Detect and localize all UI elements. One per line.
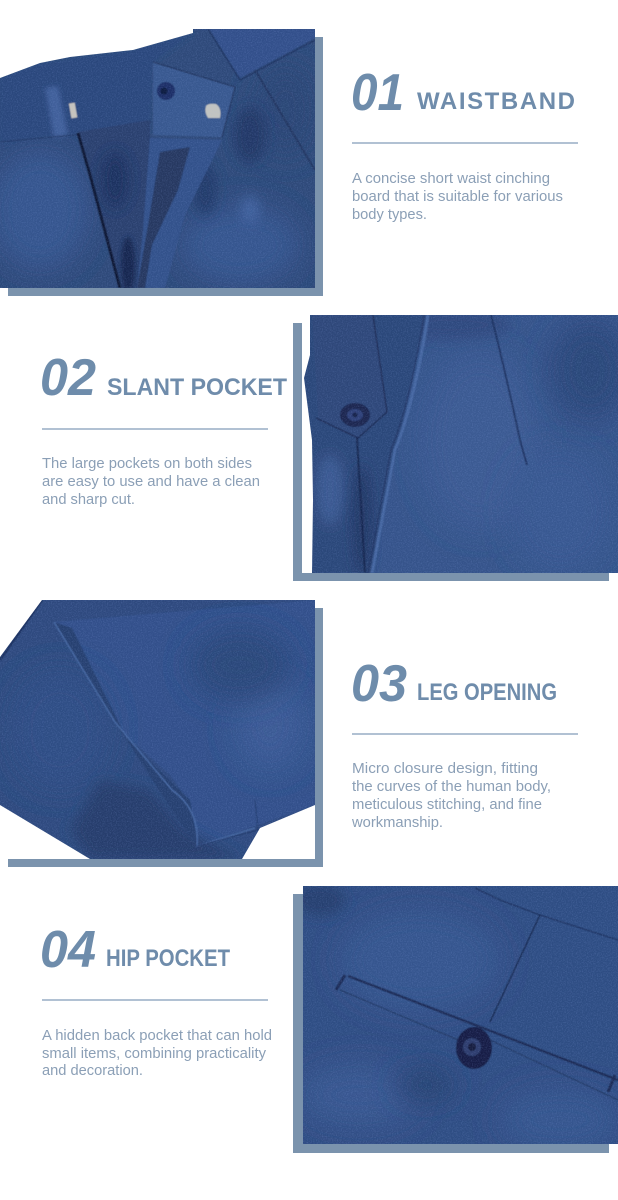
panel: leg opening bbox=[0, 595, 323, 867]
heading: 03 leg opening bbox=[351, 655, 557, 713]
divider bbox=[352, 733, 578, 735]
text block: leg opening: Micro closure design, fitting bbox=[352, 761, 538, 777]
welt pocket bbox=[348, 976, 618, 1080]
heading: 02 slant pocket bbox=[40, 349, 287, 407]
pocket edge bbox=[372, 315, 428, 573]
fly opening lining bbox=[78, 120, 150, 288]
button bbox=[157, 82, 175, 100]
tab button bbox=[340, 403, 370, 427]
text block: hip pocket: small items, combining practicality bbox=[42, 1046, 267, 1062]
panel: hip pocket bbox=[293, 881, 618, 1153]
fabric weave bbox=[0, 600, 315, 859]
text block: leg opening: meticulous stitching, and fine bbox=[352, 797, 542, 813]
text block: waistband: board that is suitable for various bbox=[352, 189, 563, 205]
heading: 04 hip pocket: HIP POCKET bbox=[106, 945, 230, 972]
pleat bbox=[491, 315, 527, 465]
photo backing bar bbox=[8, 608, 323, 867]
text block: leg opening: the curves of the human body, bbox=[352, 779, 551, 795]
heading: 01 waistband: WAISTBAND bbox=[417, 88, 575, 115]
text block: leg opening: workmanship. bbox=[351, 815, 443, 831]
text block: slant pocket: and sharp cut. bbox=[42, 492, 135, 508]
heading: 01 waistband bbox=[351, 64, 575, 122]
divider bbox=[42, 428, 268, 430]
folded hem bbox=[54, 600, 315, 846]
text block: waistband: A concise short waist cinching bbox=[352, 171, 550, 187]
heading: 04 hip pocket: 04 bbox=[40, 921, 96, 979]
photo: hip pocket bbox=[294, 881, 618, 1150]
heading: 03 leg opening: LEG OPENING bbox=[417, 679, 557, 706]
heading: 01 waistband: 01 bbox=[351, 64, 404, 122]
fabric weave bbox=[0, 29, 315, 288]
photo: waistband closure bbox=[0, 24, 320, 293]
heading: 04 hip pocket bbox=[40, 921, 230, 979]
text block: hip pocket: and decoration. bbox=[42, 1063, 143, 1079]
text block: slant pocket: The large pockets on both sides bbox=[42, 456, 252, 472]
divider bbox=[352, 142, 578, 144]
panel: slant pocket bbox=[293, 310, 618, 581]
text block: slant pocket: are easy to use and have a clean bbox=[42, 474, 260, 490]
fly flap bbox=[137, 138, 222, 288]
photo: leg opening bbox=[0, 595, 320, 864]
metal hook bbox=[69, 103, 77, 118]
pocket button bbox=[456, 1027, 492, 1069]
heading: 02 slant pocket: 02 bbox=[40, 349, 96, 407]
heading: 03 leg opening: 03 bbox=[351, 655, 407, 713]
belt tab bbox=[312, 315, 387, 438]
divider bbox=[42, 999, 268, 1001]
photo backing bar bbox=[293, 323, 609, 581]
metal snap bbox=[205, 104, 220, 118]
photo backing bar bbox=[8, 37, 323, 296]
photo: slant pocket bbox=[295, 310, 618, 578]
text block: waistband: body types. bbox=[352, 207, 427, 223]
fabric weave bbox=[300, 315, 618, 573]
waist seam bbox=[475, 888, 618, 940]
fabric weave bbox=[303, 886, 618, 1144]
zipper bbox=[78, 133, 120, 288]
lower leg shadow bbox=[72, 780, 227, 859]
text block: hip pocket: A hidden back pocket that can hold bbox=[42, 1028, 272, 1044]
photo backing bar bbox=[293, 894, 609, 1153]
button tab bbox=[153, 62, 235, 137]
heading: 02 slant pocket: SLANT POCKET bbox=[107, 374, 287, 401]
panel: waistband bbox=[0, 24, 323, 296]
